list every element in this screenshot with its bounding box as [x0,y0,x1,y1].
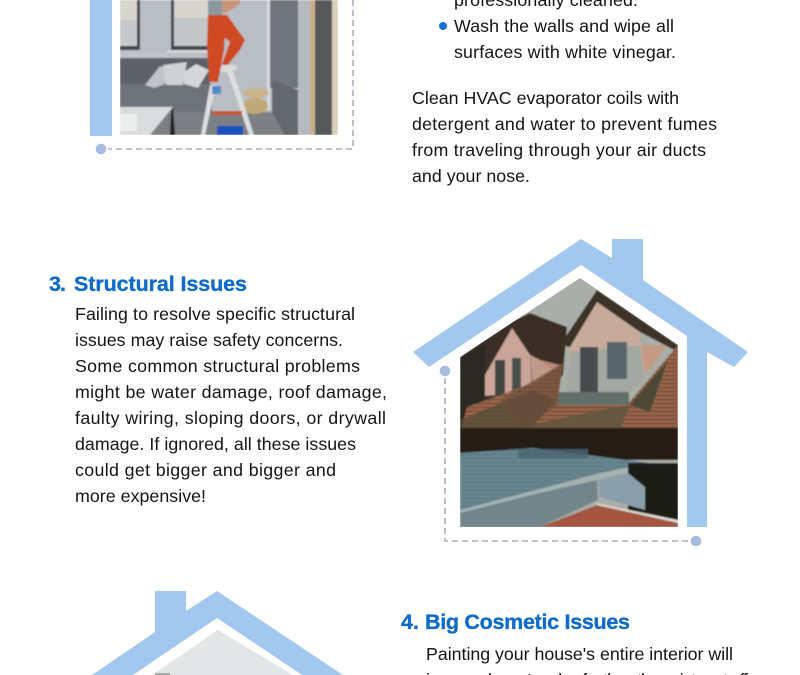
connector dots [440,366,450,376]
text block: HVAC paragraph: detergent and water to prevent fumes [412,114,717,134]
heading: 4. Big Cosmetic Issues: Big Cosmetic Issues [425,610,630,634]
roof and wall [413,239,748,527]
photo detail [155,673,170,675]
heading: 4. Big Cosmetic Issues: 4. [401,610,419,634]
house frame: section 4 [92,591,343,675]
text block: HVAC paragraph: and your nose. [412,166,530,186]
photo: woman on ladder in living room [120,0,338,135]
heading: 3. Structural Issues: 3. [49,272,66,296]
connector dot [96,144,106,154]
person [207,15,226,82]
text block: HVAC paragraph: Clean HVAC evaporator coils with [412,88,679,108]
wall band [90,0,112,136]
text block: structural issues [75,304,387,506]
text block: cosmetic issues [426,644,748,675]
house frame: section 2 [90,0,353,154]
text block: HVAC paragraph [412,88,717,186]
bullet [439,22,447,30]
ladder [201,85,216,135]
dashed outline [108,0,353,149]
text block: structural issues: Failing to resolve specific structural [75,304,355,324]
text block: HVAC paragraph: from traveling through your air ducts [412,140,706,160]
house frame: section 3 [413,239,748,546]
text block: structural issues: could get bigger and bigger and [75,460,336,480]
text block: structural issues: more expensive! [75,486,206,506]
text block: structural issues: issues may raise safety concerns. [75,330,343,350]
roof and chimney [92,591,343,675]
text block: structural issues: damage. If ignored, all these issues [75,434,356,454]
photo: grey interior top [152,630,293,675]
bullet list item: wash the walls: surfaces with white vinegar. [454,42,676,62]
text block: cosmetic issues: Painting your house's entire interior will [426,644,733,664]
bullet text: Wash the walls and wipe all [454,16,674,36]
text block: structural issues: might be water damage, roof damage, [75,382,387,402]
text block: structural issues: faulty wiring, sloping doors, or drywall [75,408,386,428]
bullet list item: wash the walls [439,16,676,62]
heading: 3. Structural Issues: Structural Issues [74,272,247,296]
photo: weathered house roof [460,270,678,530]
dashed outline [445,378,690,541]
text block: structural issues: Some common structural problems [75,356,360,376]
